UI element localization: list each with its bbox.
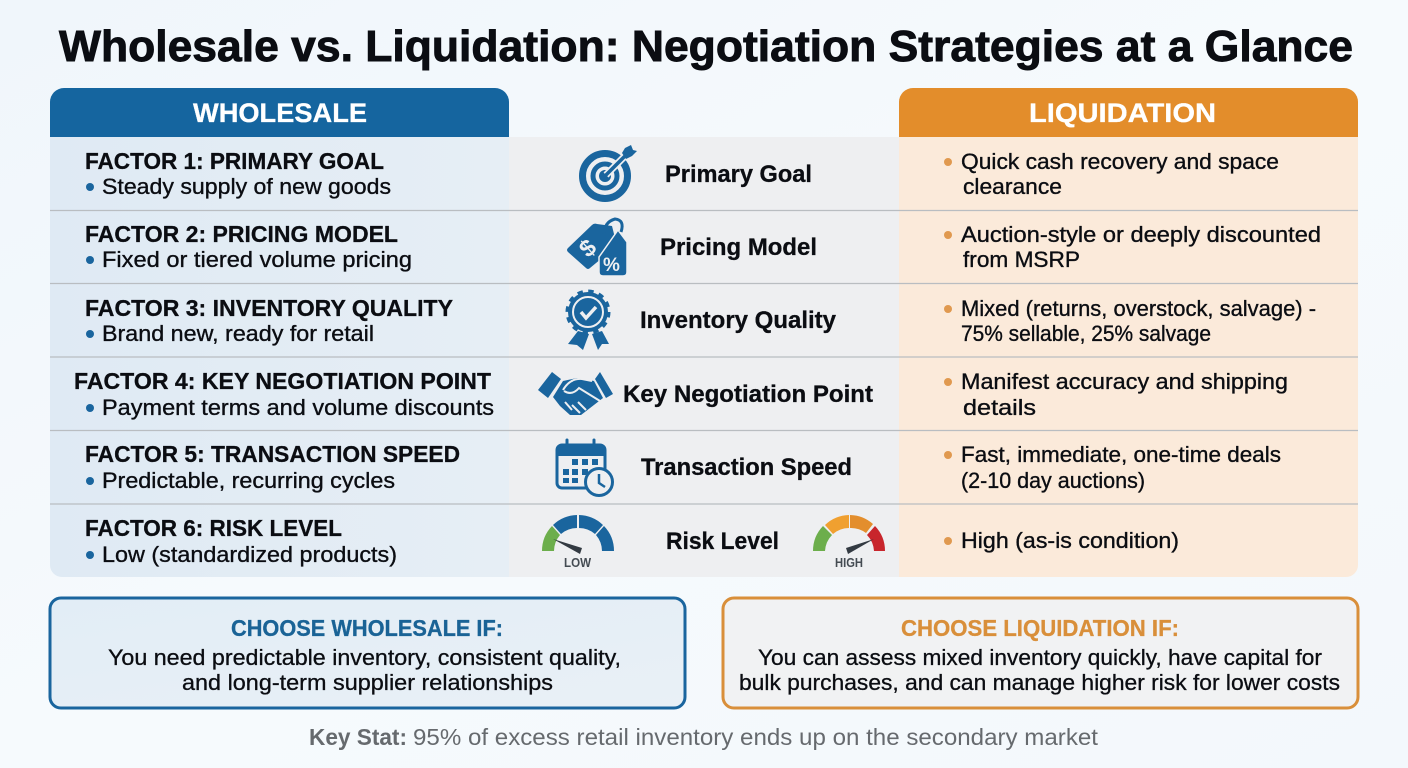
factor 1: Steady supply of new goods [102, 174, 391, 199]
icon: high risk gauge: HIGH [835, 555, 863, 570]
liquidation header [899, 88, 1358, 137]
liquidation point 3: Mixed (returns, overstock, salvage) - [961, 296, 1316, 321]
label: primary goal: Primary Goal [665, 161, 812, 188]
key stat: 95% of excess retail inventory ends up on the secondary market [413, 724, 1099, 750]
icon: low risk gauge: LOW [564, 555, 592, 570]
icon: target [582, 145, 637, 198]
liquidation point 5: Fast, immediate, one-time deals [961, 442, 1281, 467]
liquidation point 2 [944, 222, 1321, 272]
liquidation point 6: High (as-is condition) [961, 528, 1179, 553]
factor 2 [85, 221, 412, 272]
factor 4: FACTOR 4: KEY NEGOTIATION POINT [74, 368, 491, 394]
liquidation point 5: (2-10 day auctions) [961, 468, 1145, 493]
panel: center factors column [509, 137, 899, 577]
callout: choose liquidation: You can assess mixed inventory quickly, have capital for [758, 645, 1322, 670]
callout: choose liquidation: bulk purchases, and can manage higher risk for lower costs [739, 670, 1340, 695]
wholesale header [50, 88, 509, 137]
liquidation point 3: 75% sellable, 25% salvage [961, 321, 1211, 346]
panel: wholesale column [50, 88, 509, 577]
liquidation point 1: clearance [963, 174, 1062, 199]
liquidation point 4: details [963, 395, 1036, 420]
factor 6: FACTOR 6: RISK LEVEL [85, 515, 342, 541]
factor 5: Predictable, recurring cycles [102, 468, 395, 493]
icon: price tags: % [603, 255, 620, 276]
factor 2: FACTOR 2: PRICING MODEL [85, 221, 398, 247]
liquidation point 1 [944, 149, 1279, 199]
factor 3: Brand new, ready for retail [102, 321, 374, 346]
factor 5 [85, 441, 460, 493]
label: risk level: Risk Level [666, 528, 779, 555]
factor 3: FACTOR 3: INVENTORY QUALITY [85, 295, 453, 321]
icon: low risk gauge [542, 515, 614, 570]
liquidation point 5 [944, 442, 1281, 493]
label: transaction speed: Transaction Speed [641, 454, 852, 481]
title: Wholesale vs. Liquidation: Negotiation Strategies at a Glance [59, 22, 1353, 71]
wholesale header: WHOLESALE [193, 98, 367, 128]
liquidation point 4 [944, 369, 1288, 420]
callout: choose wholesale: and long-term supplier relationships [182, 670, 553, 695]
label: pricing model: Pricing Model [660, 234, 817, 261]
icon: handshake [538, 372, 613, 415]
factor 6: Low (standardized products) [102, 542, 397, 567]
factor 1: FACTOR 1: PRIMARY GOAL [85, 148, 384, 174]
callout: choose wholesale [50, 598, 685, 708]
liquidation point 2: from MSRP [963, 247, 1080, 272]
liquidation point 1: Quick cash recovery and space [961, 149, 1279, 174]
callout: choose wholesale: CHOOSE WHOLESALE IF: [231, 615, 503, 641]
callout: choose liquidation [723, 598, 1358, 708]
factor 3 [85, 295, 453, 346]
liquidation point 3 [944, 296, 1316, 346]
liquidation point 4: Manifest accuracy and shipping [961, 369, 1288, 394]
icon: high risk gauge [813, 515, 885, 570]
callout: choose liquidation: CHOOSE LIQUIDATION IF: [901, 615, 1179, 641]
icon: price tags [567, 219, 627, 276]
icon: price tags: $ [574, 234, 603, 263]
key stat: Key Stat: [309, 724, 407, 750]
factor 2: Fixed or tiered volume pricing [102, 247, 412, 272]
factor 1 [85, 148, 391, 199]
icon: calendar clock [557, 440, 612, 496]
liquidation point 2: Auction-style or deeply discounted [961, 222, 1321, 247]
factor 4 [74, 368, 494, 420]
factor 4: Payment terms and volume discounts [102, 395, 494, 420]
callout: choose wholesale: You need predictable inventory, consistent quality, [108, 645, 621, 670]
factor 6 [85, 515, 397, 567]
panel: liquidation column [899, 88, 1358, 577]
factor 5: FACTOR 5: TRANSACTION SPEED [85, 441, 460, 467]
label: inventory quality: Inventory Quality [640, 307, 837, 334]
liquidation header: LIQUIDATION [1029, 98, 1216, 128]
icon: quality badge [568, 292, 609, 350]
label: key negotiation point: Key Negotiation Point [623, 381, 873, 408]
